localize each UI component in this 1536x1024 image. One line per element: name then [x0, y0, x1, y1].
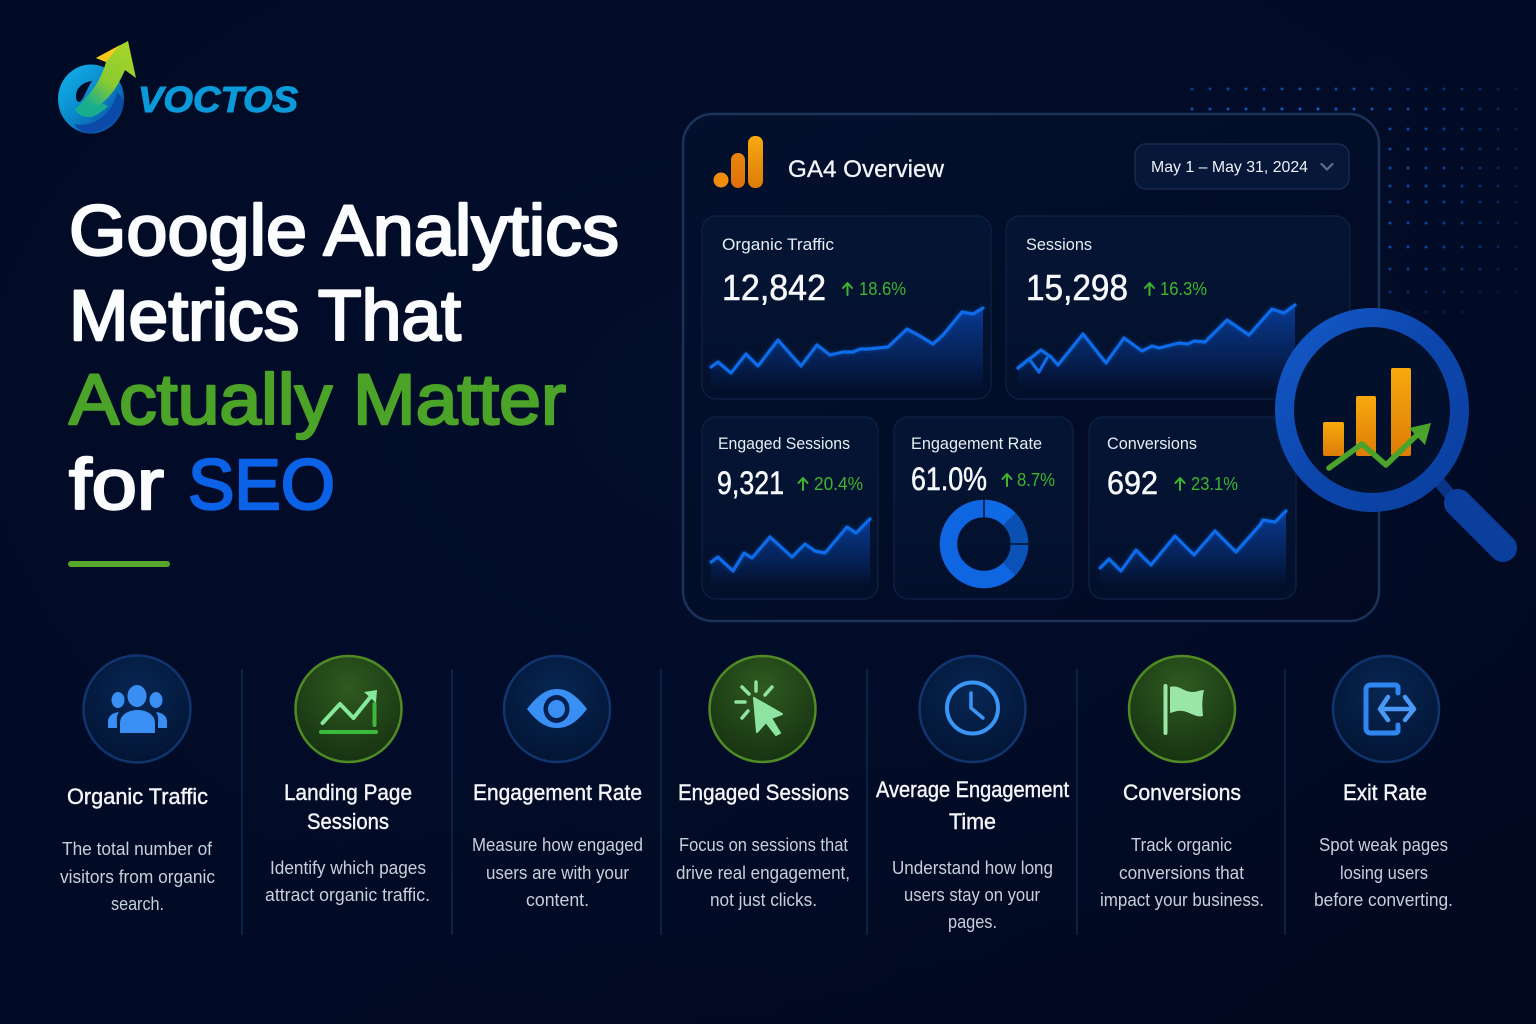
- icon: clock: [920, 656, 1026, 762]
- card: Organic Traffic: 12,842: [722, 267, 826, 308]
- title: [69, 192, 619, 525]
- card: Engaged Sessions: [702, 417, 878, 599]
- magnifier bar chart: [1323, 368, 1411, 456]
- description: search.: [111, 894, 164, 914]
- metric: Engaged Sessions: [676, 656, 850, 910]
- description: Focus on sessions that: [679, 835, 848, 855]
- title: SEO: [188, 446, 335, 525]
- heading: Landing Page: [284, 780, 412, 805]
- heading: Time: [949, 809, 996, 834]
- card: Sessions: 15,298: [1026, 267, 1128, 308]
- title: Metrics That: [69, 277, 461, 356]
- description: [676, 835, 850, 910]
- icon: exit arrows: [1333, 656, 1439, 762]
- heading: Engagement Rate: [473, 780, 642, 805]
- metric: Conversions: [1100, 656, 1264, 910]
- logo: Voctos: [58, 41, 298, 134]
- description: [892, 858, 1053, 932]
- description: [265, 858, 430, 905]
- metric: Average Engagement Time: [876, 656, 1069, 932]
- description: Identify which pages: [270, 858, 426, 878]
- icon: cursor click: [710, 656, 816, 762]
- logo wordmark: VOCTOS: [138, 79, 298, 120]
- heading: [876, 777, 1069, 834]
- heading: [284, 780, 412, 834]
- title: Google Analytics: [69, 192, 619, 271]
- description: Measure how engaged: [472, 835, 643, 855]
- card: Engaged Sessions: Engaged Sessions: [718, 434, 850, 453]
- description: [1314, 835, 1453, 910]
- metric: Organic Traffic: [60, 656, 215, 914]
- card: Engagement Rate: 8.7%: [1017, 470, 1055, 490]
- card: Engagement Rate: 61.0%: [911, 461, 987, 497]
- magnifier trend arrow: [1329, 423, 1431, 468]
- title: for: [69, 446, 164, 525]
- card: Conversions: [1089, 417, 1296, 599]
- metric: Engagement Rate: [472, 656, 643, 910]
- card: Organic Traffic: Organic Traffic: [722, 235, 834, 254]
- title underline: [68, 561, 170, 567]
- description: visitors from organic: [60, 867, 215, 887]
- card: Engagement Rate: Engagement Rate: [911, 434, 1042, 453]
- heading: Organic Traffic: [67, 784, 208, 809]
- description: impact your business.: [1100, 890, 1264, 910]
- card: Engagement Rate: [894, 417, 1073, 599]
- metric: Landing Page Sessions: [265, 656, 430, 905]
- description: users are with your: [486, 863, 629, 883]
- column dividers: [242, 669, 1285, 935]
- dashboard heading: GA4 Overview: [788, 156, 945, 183]
- icon: people: [84, 656, 190, 762]
- description: [472, 835, 643, 910]
- description: Understand how long: [892, 858, 1053, 878]
- description: conversions that: [1119, 863, 1244, 883]
- description: content.: [526, 890, 589, 910]
- card: Engaged Sessions: 20.4%: [814, 474, 863, 494]
- heading: Conversions: [1123, 780, 1241, 805]
- card: Conversions: 23.1%: [1191, 474, 1238, 494]
- description: pages.: [948, 912, 997, 932]
- description: before converting.: [1314, 890, 1453, 910]
- icon: eye: [504, 656, 610, 762]
- donut chart: [948, 499, 1029, 580]
- card: Sessions: [1006, 216, 1350, 399]
- date range selector: [1135, 144, 1349, 189]
- description: attract organic traffic.: [265, 885, 430, 905]
- description: not just clicks.: [710, 890, 817, 910]
- title: Actually Matter: [69, 361, 566, 440]
- description: [60, 839, 215, 914]
- date range selector: May 1 – May 31, 2024: [1151, 159, 1308, 176]
- card: Engaged Sessions: 9,321: [717, 465, 784, 501]
- description: The total number of: [62, 839, 213, 859]
- icon: flag: [1129, 656, 1235, 762]
- card: Sessions: 16.3%: [1160, 279, 1207, 299]
- description: drive real engagement,: [676, 863, 850, 883]
- heading: Average Engagement: [876, 777, 1069, 802]
- card: Sessions: Sessions: [1026, 235, 1092, 254]
- description: Track organic: [1131, 835, 1232, 855]
- description: losing users: [1340, 863, 1428, 883]
- heading: Sessions: [307, 809, 389, 834]
- card: Conversions: Conversions: [1107, 434, 1197, 453]
- heading: Exit Rate: [1343, 780, 1427, 805]
- card: Organic Traffic: 18.6%: [859, 279, 906, 299]
- background dot pattern: [1192, 89, 1525, 312]
- card: Conversions: 692: [1107, 465, 1158, 501]
- panel: GA4 dashboard: [683, 114, 1379, 621]
- metric: Exit Rate: [1314, 656, 1453, 910]
- card: Organic Traffic: [702, 216, 991, 399]
- logo mark: [58, 41, 136, 134]
- magnifying glass: [1284, 318, 1503, 548]
- description: Spot weak pages: [1319, 835, 1448, 855]
- heading: Engaged Sessions: [678, 780, 849, 805]
- icon: trend line: [296, 656, 402, 762]
- icon: Google Analytics bars: [714, 136, 763, 188]
- description: users stay on your: [904, 885, 1040, 905]
- description: [1100, 835, 1264, 910]
